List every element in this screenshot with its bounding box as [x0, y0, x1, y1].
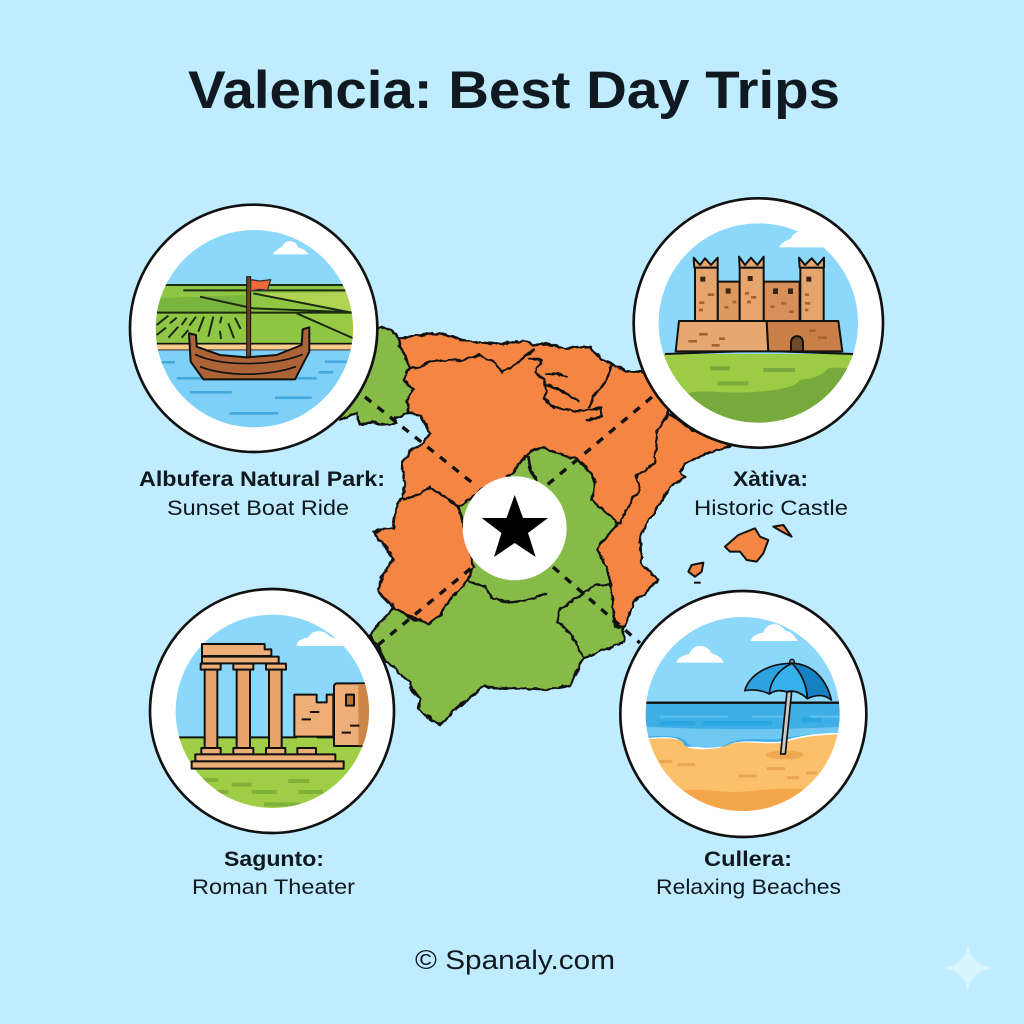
icon: boat mast: [247, 277, 251, 358]
label line: Relaxing Beaches: [656, 875, 841, 899]
route: to Sagunto: [378, 565, 475, 645]
panel: Cullera circle: [620, 591, 866, 837]
label line: Sunset Boat Ride: [167, 496, 349, 520]
title: Valencia: Best Day Trips: [188, 61, 840, 120]
region borders: [403, 350, 668, 658]
label: Albufera: [139, 467, 385, 520]
icon: temple columns: [192, 644, 344, 769]
label: Cullera: [656, 847, 841, 899]
label: Cullera: Cullera:: [704, 847, 792, 871]
icon: star: [482, 495, 548, 557]
route: to Cullera: [553, 567, 640, 643]
scene: beach: [643, 613, 843, 813]
label: Sagunto: [192, 847, 355, 899]
icon: ruined wall: [294, 683, 373, 746]
map of Spain: [340, 327, 792, 725]
label line: Historic Castle: [694, 496, 848, 520]
route: to Xativa: [547, 397, 652, 485]
label line: Roman Theater: [192, 875, 355, 899]
panel: Albufera circle: [130, 205, 377, 452]
label: Xativa: [694, 467, 848, 520]
icon: sparkle watermark: [943, 944, 993, 992]
icon: castle: [676, 257, 842, 351]
scene: castle: [655, 220, 865, 427]
panel: Sagunto circle: [150, 589, 394, 833]
label: Sagunto: Sagunto:: [224, 847, 324, 871]
copyright footer: © Spanaly.com: [415, 945, 615, 975]
map regions: [340, 327, 733, 725]
region: Galicia: [340, 327, 413, 425]
label: Albufera: Albufera Natural Park:: [139, 467, 385, 491]
castle windows and bricks: [688, 276, 827, 345]
panel: Xativa circle: [634, 198, 883, 448]
balearic islands: [688, 525, 792, 583]
central marker with star: [463, 476, 567, 580]
icon: umbrella: [745, 659, 831, 754]
scene: roman ruins: [170, 610, 373, 813]
icon: red flag: [251, 280, 271, 291]
region: central and southern green area: [370, 447, 624, 725]
scene: boat on lagoon: [153, 228, 357, 430]
icon: boat hull: [189, 327, 309, 379]
region: northern and western orange area: [373, 333, 733, 627]
label: Xativa: Xàtiva:: [733, 467, 808, 491]
route: to Albufera: [365, 397, 475, 485]
